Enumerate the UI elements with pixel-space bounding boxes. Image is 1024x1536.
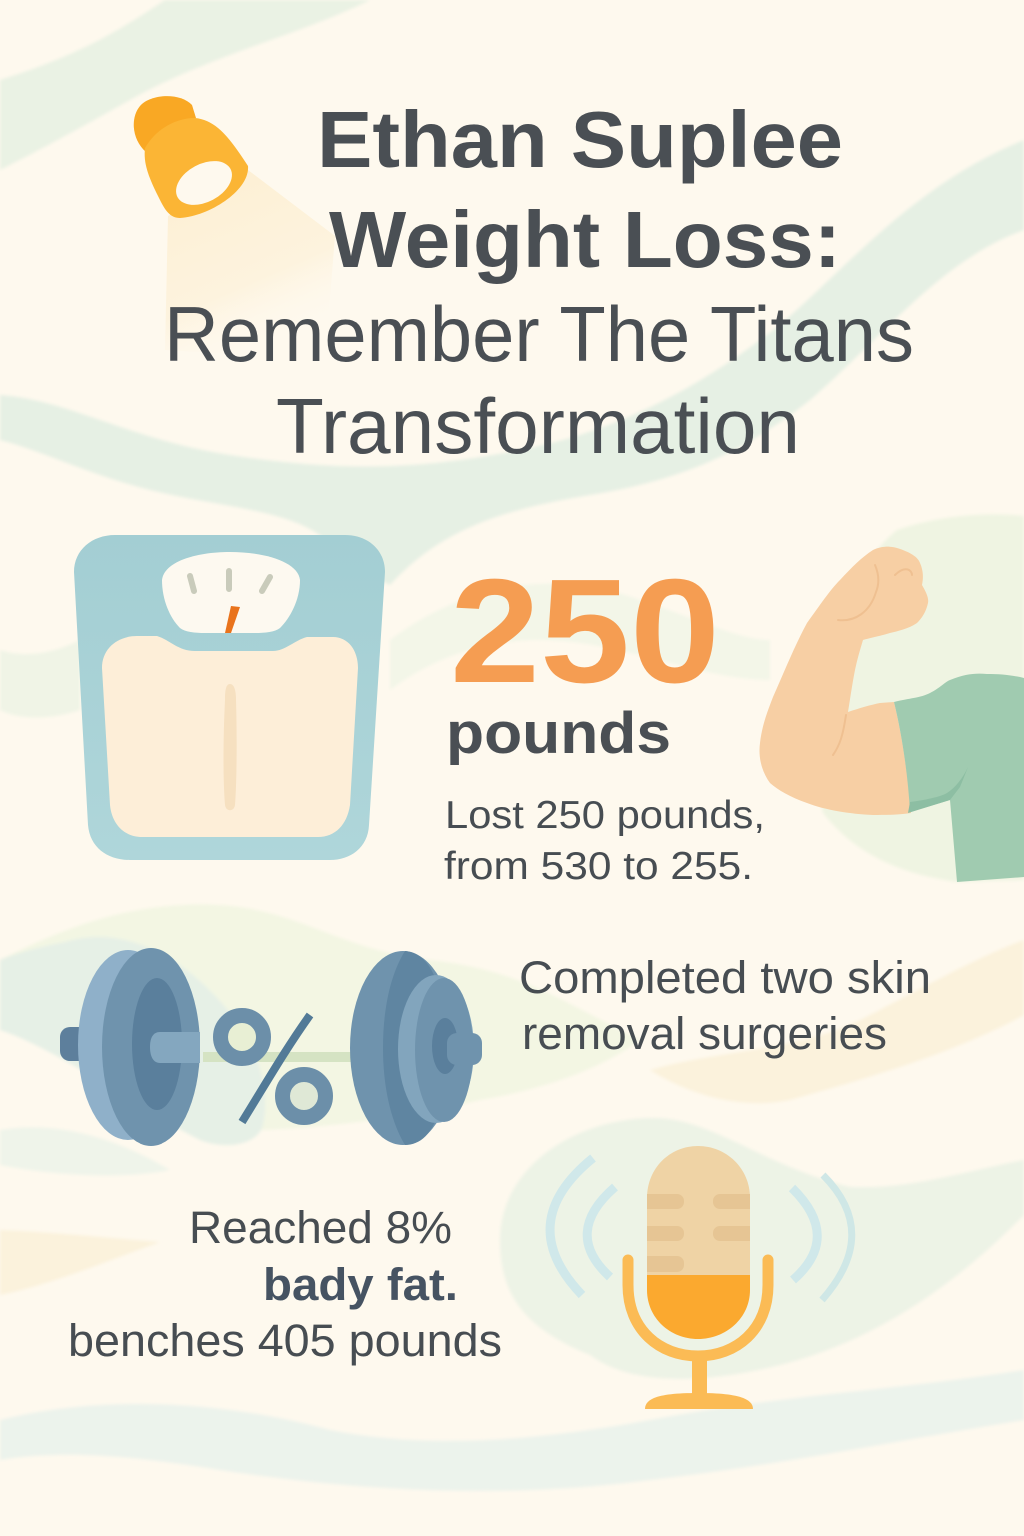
description: Lost 250 pounds,	[445, 794, 765, 837]
stat: 250 pounds	[444, 549, 765, 888]
description	[444, 794, 765, 888]
icon: microphone	[550, 1146, 852, 1409]
icon: dumbbell with percent sign	[60, 948, 482, 1146]
text: skin removal surgeries	[519, 952, 931, 1059]
title: Weight Loss:	[329, 195, 841, 284]
unit label pounds: pounds	[446, 701, 671, 766]
title	[164, 95, 914, 470]
text: skin removal surgeries: Completed two skin	[519, 952, 931, 1003]
icon: weighing scale	[74, 535, 385, 860]
title line: Ethan Suplee: Ethan Suplee	[317, 95, 843, 184]
text: body fat and bench: benches 405 pounds	[68, 1315, 502, 1366]
title: Remember The Titans	[164, 290, 914, 378]
percent sign	[220, 1015, 326, 1122]
description: from 530 to 255.	[444, 845, 753, 888]
big number 250: 250	[450, 549, 720, 714]
icon: flexed arm	[759, 547, 1024, 882]
title: Transformation	[276, 382, 800, 470]
text: body fat and bench: Reached 8%	[189, 1202, 452, 1253]
text: body fat and bench	[68, 1202, 502, 1366]
icon: spotlight lamp	[134, 96, 335, 360]
text: skin removal surgeries: removal surgeries	[522, 1008, 887, 1059]
text: body fat and bench: bady fat.	[263, 1259, 458, 1310]
